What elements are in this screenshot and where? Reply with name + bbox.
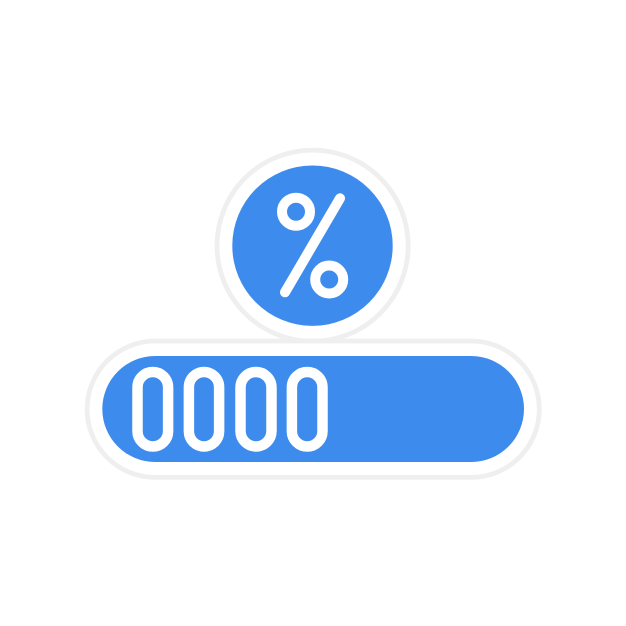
- percent badge: [232, 166, 393, 326]
- icon: percent sign: [282, 198, 343, 294]
- bar fill: [102, 356, 524, 462]
- badge circle: [232, 166, 393, 326]
- sticker outline: progress bar: [87, 341, 539, 477]
- progress segments: [138, 372, 322, 446]
- progress bar: [102, 356, 524, 462]
- sticker outline: percent circle: [217, 150, 408, 341]
